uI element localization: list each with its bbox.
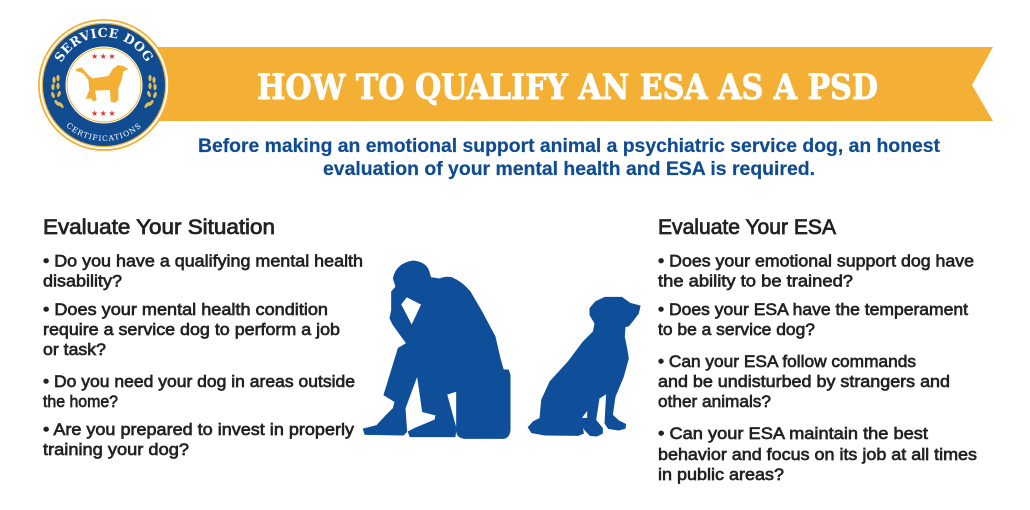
heading: evaluate your situation: Evaluate Your Situation [43, 216, 275, 239]
question list: situation: the home? [43, 392, 118, 411]
question list: esa: the ability to be trained? [658, 272, 853, 290]
logo badge: SERVICE DOG [54, 28, 153, 62]
panel: evaluate your situation [43, 216, 363, 459]
icon: gold dog in badge [76, 65, 128, 103]
question list: esa: other animals? [658, 392, 771, 411]
panel: evaluate your esa [658, 216, 977, 484]
question list: situation: • Do you need your dog in areas outside [43, 372, 355, 391]
question list: situation [43, 252, 363, 459]
question list: situation: training your dog? [43, 440, 189, 459]
logo badge: CERTIFICATIONS [67, 123, 140, 141]
question list: esa: behavior and focus on its job at all times [658, 445, 977, 464]
question list: esa: and be undisturbed by strangers and [658, 372, 950, 391]
logo badge: ★★★ [91, 52, 117, 61]
title banner: HOW TO QUALIFY AN ESA AS A PSD [257, 67, 878, 108]
question list: situation: • Are you prepared to invest in properly [43, 420, 355, 439]
icon: seated person silhouette [363, 261, 510, 438]
question list: situation: require a service dog to perform a job [43, 320, 340, 339]
icon: left laurel [50, 75, 65, 109]
question list: esa: • Can your ESA maintain the best [658, 424, 928, 443]
subtitle [198, 135, 940, 180]
question list: esa: • Does your emotional support dog have [658, 252, 974, 270]
question list: esa: in public areas? [658, 465, 784, 484]
question list: esa: • Can your ESA follow commands [658, 352, 916, 371]
question list: esa [658, 252, 977, 484]
icon: right laurel [143, 75, 158, 109]
subtitle: Before making an emotional support animal a psychiatric service dog, an honest [198, 135, 940, 157]
question list: esa: • Does your ESA have the temperament [658, 300, 968, 319]
logo badge: ★★★ [91, 109, 117, 118]
question list: situation: or task? [43, 340, 106, 359]
logo badge [38, 19, 168, 151]
question list: esa: to be a service dog? [658, 320, 815, 339]
question list: situation: disability? [43, 272, 122, 290]
question list: situation: • Does your mental health condition [43, 300, 328, 319]
question list: situation: • Do you have a qualifying mental health [43, 252, 363, 270]
title banner [150, 47, 993, 121]
heading: evaluate your esa: Evaluate Your ESA [658, 216, 836, 239]
subtitle: evaluation of your mental health and ESA is required. [323, 158, 815, 180]
icon: seated dog silhouette [528, 297, 640, 436]
